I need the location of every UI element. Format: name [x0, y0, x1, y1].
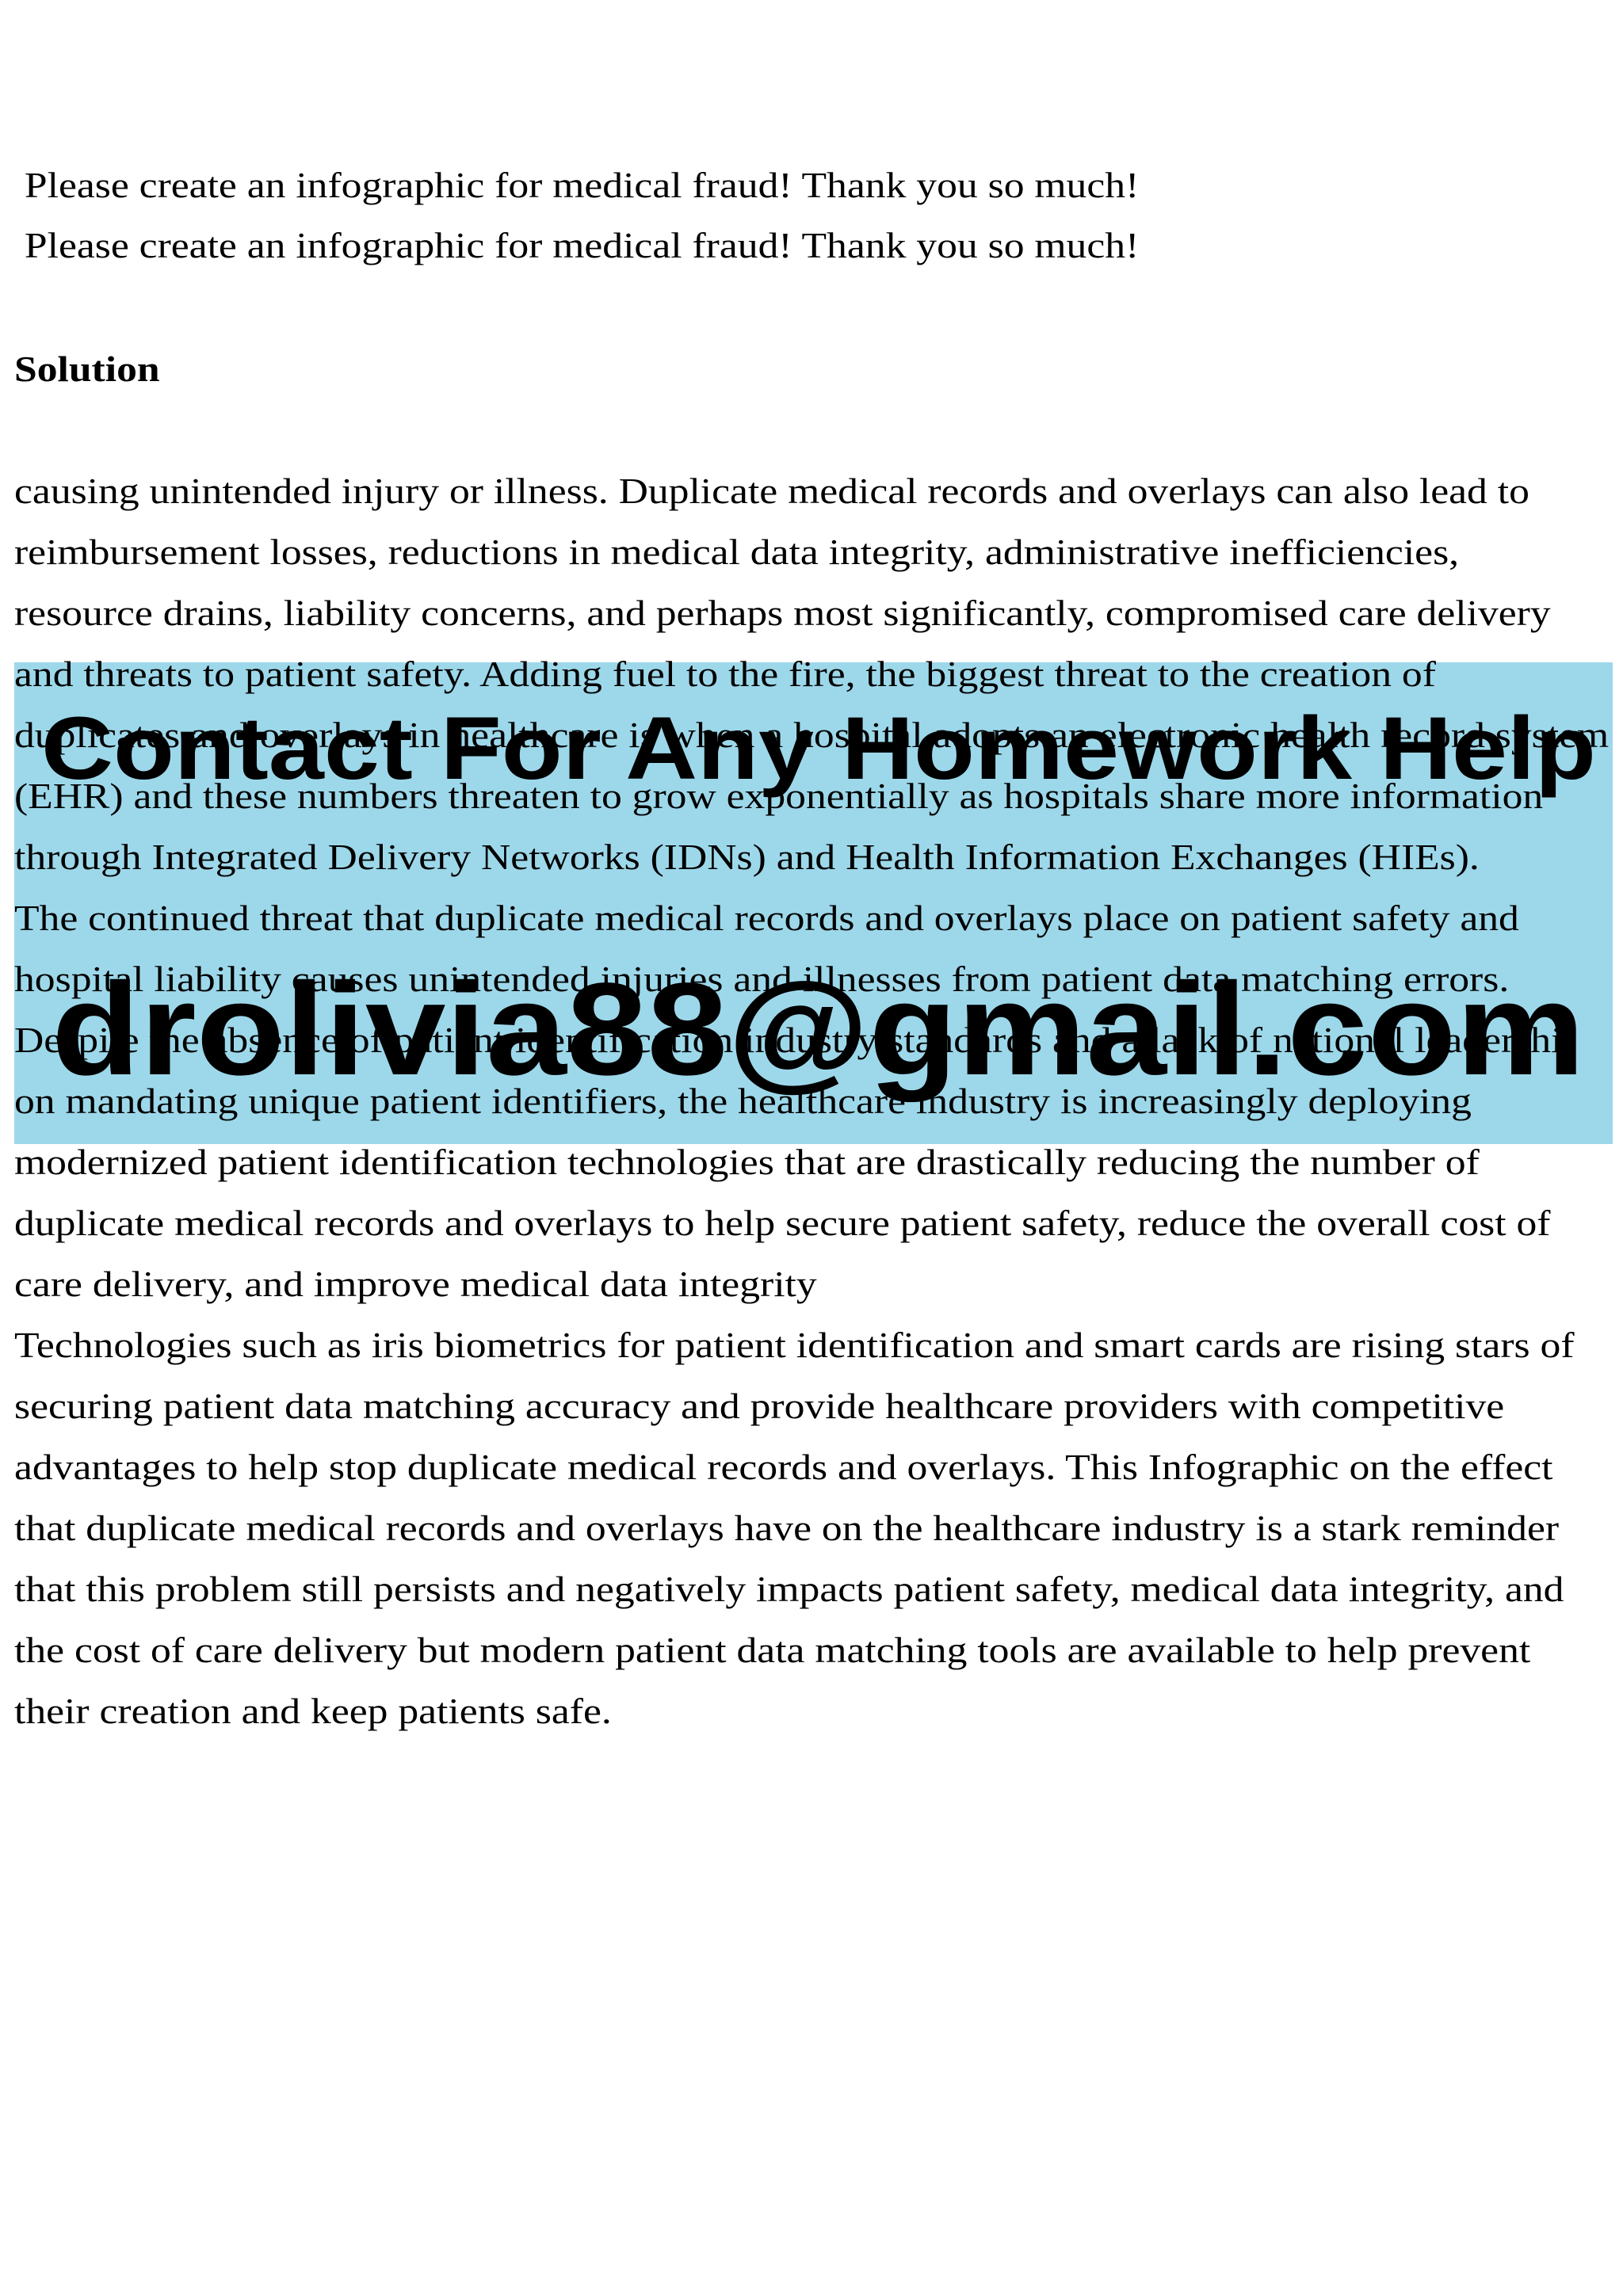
solution body text: advantages to help stop duplicate medical records and overlays. This Infographic on the effect — [14, 1447, 1552, 1487]
solution body text: that duplicate medical records and overlays have on the healthcare industry is a stark reminder — [14, 1508, 1559, 1548]
solution body text: resource drains, liability concerns, and perhaps most significantly, compromised care delivery — [14, 593, 1551, 633]
solution body text: Despite the absence of patient identification industry standards and a lack of national leadershi — [14, 1020, 1562, 1060]
solution body text: on mandating unique patient identifiers, the healthcare industry is increasingly deploying — [14, 1081, 1472, 1121]
solution body text: modernized patient identification technologies that are drastically reducing the number of — [14, 1142, 1480, 1182]
solution body text: the cost of care delivery but modern patient data matching tools are available to help prevent — [14, 1630, 1530, 1670]
solution body text: their creation and keep patients safe. — [14, 1691, 612, 1731]
solution body text: securing patient data matching accuracy and provide healthcare providers with competitive — [14, 1386, 1504, 1426]
solution body text: through Integrated Delivery Networks (IDNs) and Health Information Exchanges (HIEs). — [14, 837, 1480, 877]
solution body text: The continued threat that duplicate medical records and overlays place on patient safety and — [14, 898, 1519, 938]
solution body text: and threats to patient safety. Adding fuel to the fire, the biggest threat to the creation of — [14, 654, 1436, 694]
question line 2: Please create an infographic for medical fraud! Thank you so much! — [25, 225, 1139, 265]
solution body text: causing unintended injury or illness. Duplicate medical records and overlays can also lead to — [14, 471, 1529, 511]
watermark background band — [14, 662, 1613, 1144]
solution body text: that this problem still persists and negatively impacts patient safety, medical data integrity, and — [14, 1569, 1564, 1609]
watermark: contact line: Contact For Any Homework Help — [41, 699, 1596, 798]
solution body text: hospital liability causes unintended injuries and illnesses from patient data matching errors. — [14, 959, 1509, 999]
solution body text: Technologies such as iris biometrics for patient identification and smart cards are rising stars of — [14, 1325, 1575, 1365]
watermark: email: drolivia88@gmail.com — [52, 956, 1585, 1103]
solution body text: (EHR) and these numbers threaten to grow exponentially as hospitals share more information — [14, 776, 1543, 816]
solution body text: reimbursement losses, reductions in medical data integrity, administrative inefficiencies, — [14, 532, 1459, 572]
solution body text: duplicates and overlays in healthcare is when a hospital adopts an electronic health record system — [14, 715, 1609, 755]
solution body text: care delivery, and improve medical data integrity — [14, 1264, 817, 1304]
solution body text — [14, 471, 1609, 1731]
solution body text: duplicate medical records and overlays to help secure patient safety, reduce the overall cost of — [14, 1203, 1550, 1243]
question line 1: Please create an infographic for medical fraud! Thank you so much! — [25, 165, 1139, 205]
heading: Solution: Solution — [14, 349, 160, 389]
